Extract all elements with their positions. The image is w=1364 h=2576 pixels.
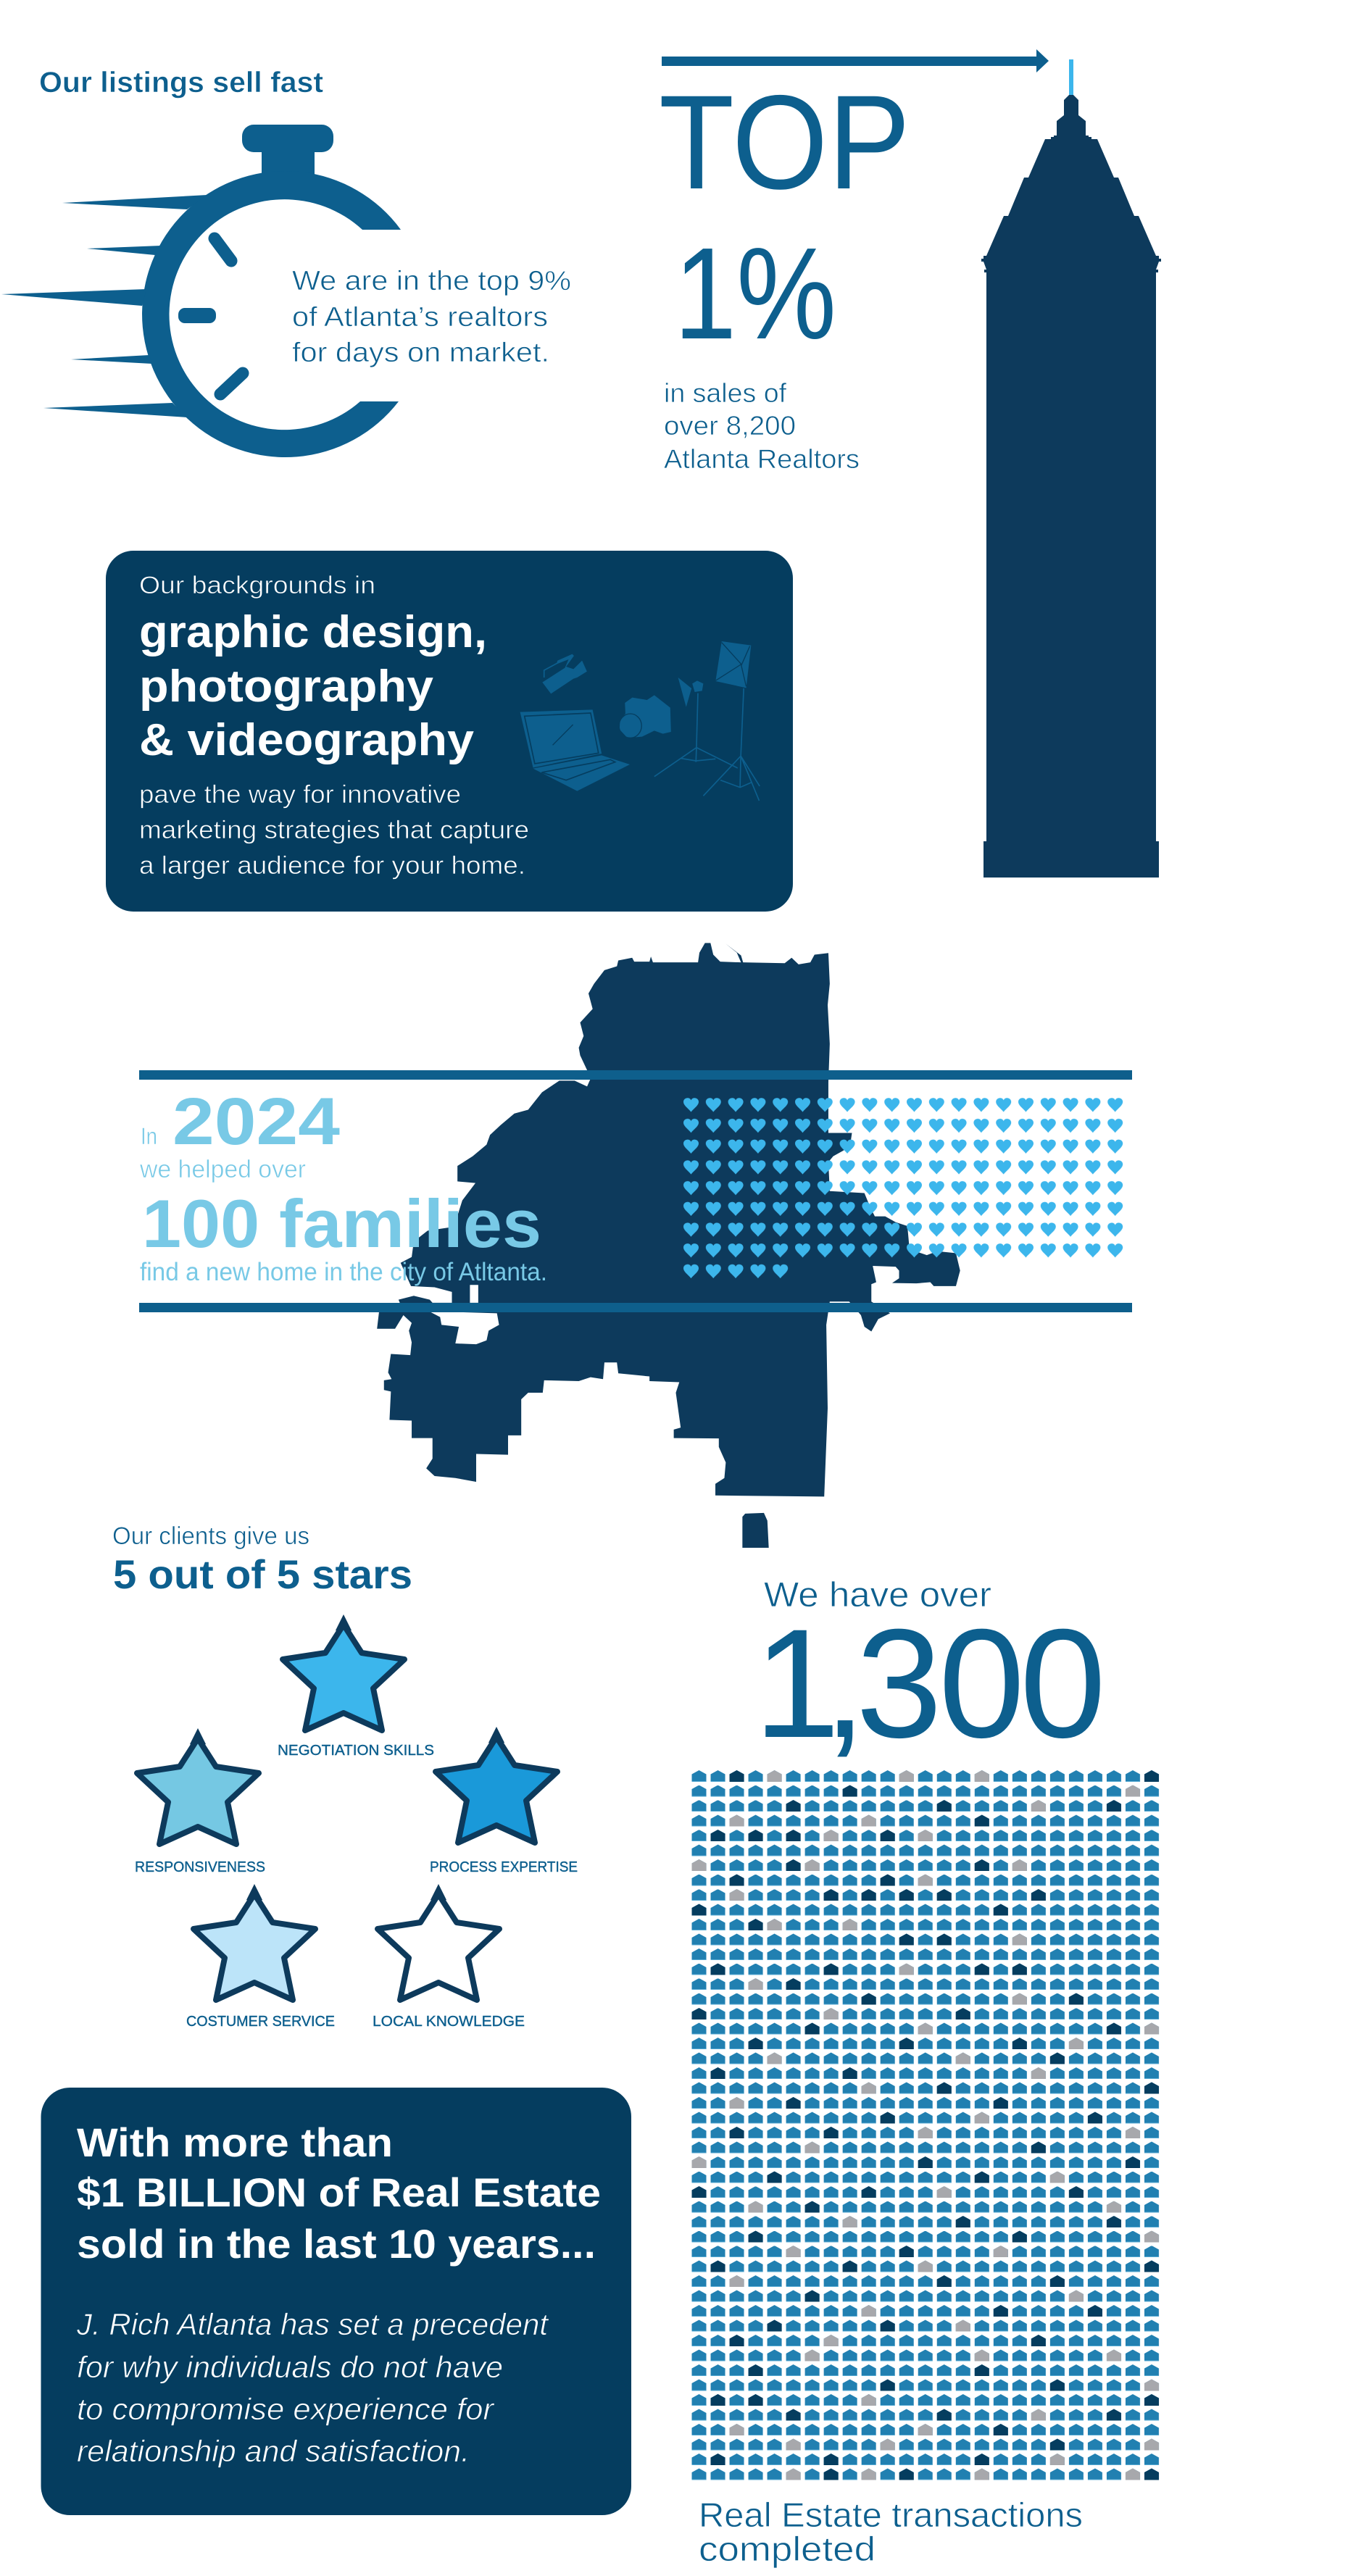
heading: five out of five stars: Our clients give us xyxy=(112,1522,309,1550)
text: top 9% days on market: of Atlanta’s realtors xyxy=(292,302,548,333)
heading: graphic design, photography, videography: photography xyxy=(139,662,434,712)
icon: laptop, camera, lights xyxy=(520,641,760,801)
text: J. Rich Atlanta precedent: to compromise experience for xyxy=(77,2392,495,2426)
text: in 2024 we helped over 100 families xyxy=(139,1085,547,1286)
text: in 2024 we helped over 100 families: we helped over xyxy=(139,1156,306,1183)
star: responsiveness xyxy=(135,1728,265,1875)
caption: real estate transactions completed: Real Estate transactions xyxy=(699,2496,1083,2534)
panel: one billion sold xyxy=(41,2088,631,2515)
heading: with more than $1 billion xyxy=(77,2119,601,2267)
text: in 2024 we helped over 100 families: In xyxy=(141,1123,157,1149)
stat: top 1%: 1% xyxy=(674,221,836,367)
star: costumer service: COSTUMER SERVICE xyxy=(186,2014,335,2030)
heading: graphic design, photography, videography xyxy=(139,607,487,765)
map: city of Atlanta silhouette xyxy=(377,943,960,1548)
heading: our listings sell fast: Our listings sell fast xyxy=(39,67,323,99)
text: pave the way: a larger audience for your home. xyxy=(139,851,525,880)
text: in 2024 we helped over 100 families: 100 families xyxy=(142,1185,541,1262)
star: local knowledge xyxy=(373,1884,525,2030)
chart: hearts, one hundred families xyxy=(680,1094,1126,1281)
star: responsiveness: RESPONSIVENESS xyxy=(135,1859,265,1875)
text: J. Rich Atlanta precedent: J. Rich Atlanta has set a precedent xyxy=(76,2307,549,2341)
star: process expertise xyxy=(430,1727,578,1875)
heading: with more than $1 billion: sold in the last 10 years... xyxy=(77,2221,596,2267)
chart: house grid of transactions xyxy=(691,1770,1163,2483)
text: pave the way: marketing strategies that capture xyxy=(139,816,529,844)
arrow: to top of tower xyxy=(662,49,1049,72)
stat: top 1% xyxy=(659,68,910,367)
text: J. Rich Atlanta precedent: for why individuals do not have xyxy=(77,2350,503,2384)
panel: backgrounds in design xyxy=(106,551,793,912)
heading: with more than $1 billion: $1 BILLION of Real Estate xyxy=(77,2169,601,2215)
stat: we have over 1,300: 1,300 xyxy=(754,1597,1106,1770)
text: pave the way: pave the way for innovative xyxy=(139,780,461,809)
text: pave the way xyxy=(139,780,529,880)
text: in 2024 we helped over 100 families: find a new home in the city of Atltanta. xyxy=(140,1258,547,1286)
star: costumer service xyxy=(186,1884,335,2030)
icon: tower silhouette xyxy=(981,59,1161,878)
star: negotiation skills: NEGOTIATION SKILLS xyxy=(278,1743,434,1759)
heading: graphic design, photography, videography: graphic design, xyxy=(139,607,487,657)
caption: real estate transactions completed: completed xyxy=(699,2530,876,2568)
text: in sales of over 8,200 Atlanta Realtors xyxy=(664,378,860,474)
text: top 9% days on market: We are in the top 9% xyxy=(292,266,571,296)
heading: five out of five stars: 5 out of 5 stars xyxy=(113,1551,412,1597)
icon: stopwatch with speed lines xyxy=(1,125,401,457)
text: top 9% days on market: for days on market. xyxy=(292,338,549,368)
rules above and below families stat xyxy=(139,1070,1132,1312)
text: in sales of over 8,200 Atlanta Realtors: in sales of xyxy=(664,378,787,408)
heading: five out of five stars xyxy=(112,1522,412,1597)
text: J. Rich Atlanta precedent xyxy=(76,2307,549,2468)
stat: we have over 1,300: We have over xyxy=(764,1576,991,1614)
star: local knowledge: LOCAL KNOWLEDGE xyxy=(373,2014,525,2030)
text: in sales of over 8,200 Atlanta Realtors: over 8,200 xyxy=(664,411,796,441)
heading: with more than $1 billion: With more than xyxy=(77,2119,393,2165)
text: in sales of over 8,200 Atlanta Realtors: Atlanta Realtors xyxy=(664,444,860,474)
stat: top 1%: TOP xyxy=(659,68,910,217)
heading: graphic design, photography, videography: & videography xyxy=(139,715,475,765)
star: process expertise: PROCESS EXPERTISE xyxy=(430,1859,578,1875)
text: top 9% days on market xyxy=(292,266,571,368)
caption: real estate transactions completed xyxy=(699,2496,1083,2568)
text: our backgrounds in: Our backgrounds in xyxy=(139,572,375,599)
star: negotiation skills xyxy=(278,1614,434,1759)
text: in 2024 we helped over 100 families: 2024 xyxy=(172,1085,340,1159)
text: J. Rich Atlanta precedent: relationship and satisfaction. xyxy=(77,2434,470,2468)
